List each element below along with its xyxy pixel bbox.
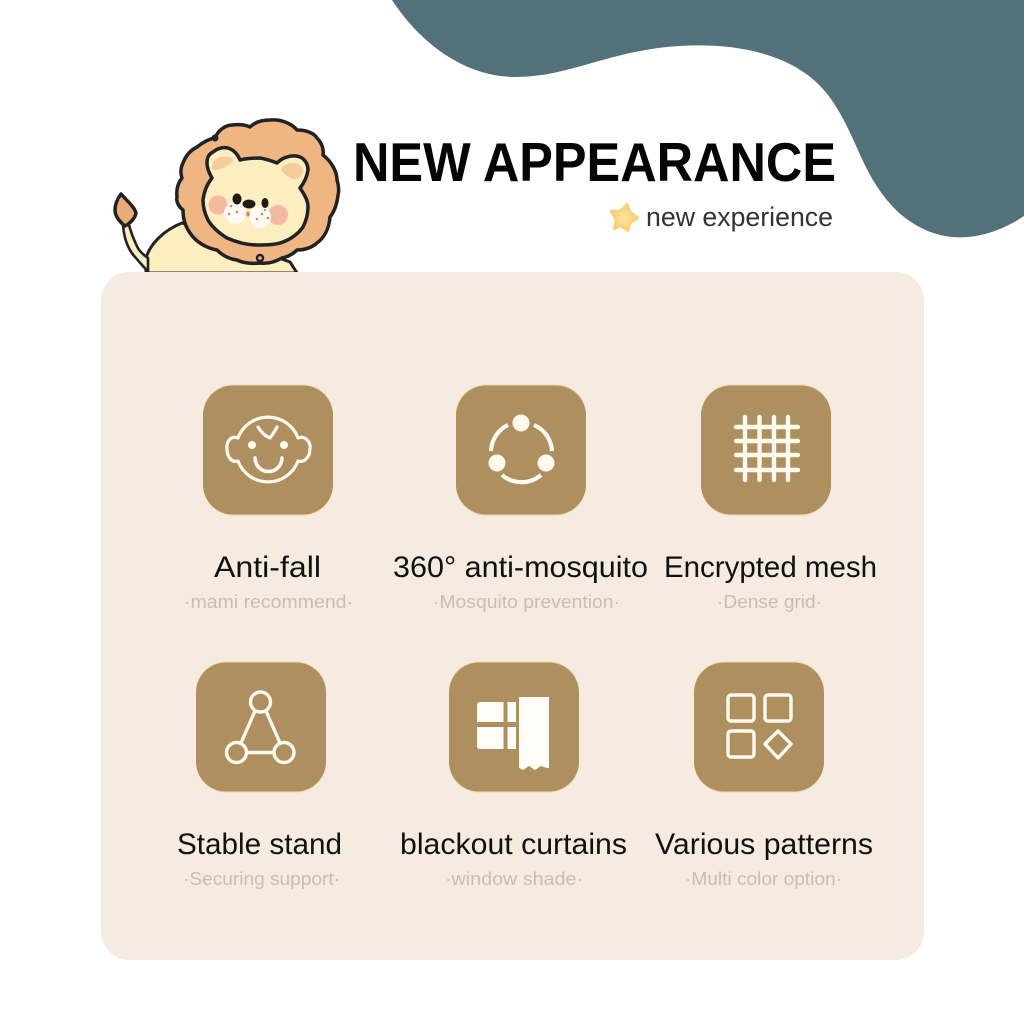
lion freckles bbox=[228, 205, 269, 220]
sublabel: ·Mosquito prevention· bbox=[433, 592, 620, 612]
feature: encrypted mesh bbox=[664, 384, 877, 612]
lion face bbox=[203, 148, 308, 245]
lion mane bbox=[177, 120, 339, 263]
feature: various patterns bbox=[655, 662, 873, 889]
lion ears bbox=[212, 156, 303, 179]
sublabel: ·Dense grid· bbox=[717, 592, 822, 612]
icon: window and curtain bbox=[449, 662, 579, 792]
label: 360° anti-mosquito bbox=[393, 551, 648, 584]
lion mascot bbox=[115, 120, 339, 273]
sublabel: ·mami recommend· bbox=[184, 592, 353, 612]
label: Encrypted mesh bbox=[664, 551, 877, 584]
icon: baby face bbox=[203, 384, 333, 516]
lion body bbox=[146, 223, 297, 273]
lion muzzle bbox=[224, 202, 246, 224]
label: Anti-fall bbox=[214, 551, 321, 584]
label: blackout curtains bbox=[400, 828, 627, 861]
background teal blob bbox=[392, 0, 1024, 237]
feature: anti-fall bbox=[184, 384, 353, 612]
lion tail tip bbox=[115, 194, 136, 226]
icon: three dots ring bbox=[456, 384, 586, 516]
panel: features bbox=[101, 272, 924, 960]
feature: stable stand bbox=[177, 662, 342, 889]
sublabel: ·window shade· bbox=[445, 869, 583, 889]
feature: blackout curtains bbox=[400, 662, 627, 889]
subtitle: new experience bbox=[646, 202, 833, 232]
lion eyes and nose bbox=[232, 194, 242, 204]
feature: 360 anti-mosquito bbox=[393, 384, 648, 612]
lion tail bbox=[123, 225, 148, 272]
icon: triangle nodes bbox=[196, 662, 326, 792]
label: Various patterns bbox=[655, 828, 873, 861]
icon: grid mesh bbox=[701, 384, 831, 516]
icon: star bbox=[611, 204, 638, 231]
sublabel: ·Securing support· bbox=[183, 869, 340, 889]
sublabel: ·Multi color option· bbox=[685, 869, 842, 889]
title: NEW APPEARANCE bbox=[353, 131, 836, 193]
label: Stable stand bbox=[177, 828, 342, 861]
lion mane curls bbox=[212, 136, 218, 140]
lion cheeks bbox=[208, 196, 228, 214]
icon: shapes grid bbox=[694, 662, 824, 792]
